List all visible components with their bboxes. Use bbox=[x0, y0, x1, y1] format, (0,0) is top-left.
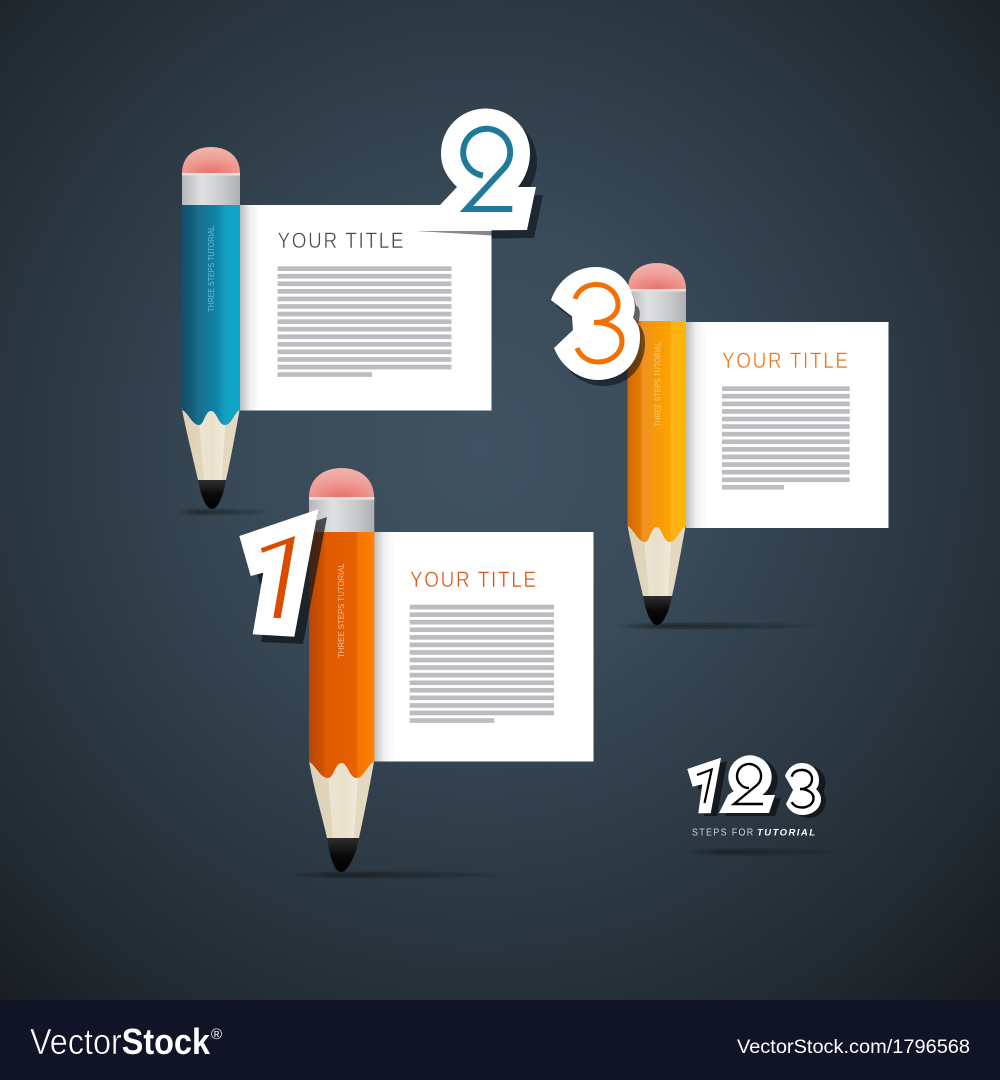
panel: step 2 bbox=[240, 205, 492, 410]
mini sticker 1 bbox=[687, 758, 721, 813]
digit 2 bbox=[463, 129, 512, 209]
panel: step 3 bbox=[686, 322, 888, 528]
ferrule top lip bbox=[309, 497, 374, 500]
eraser bbox=[182, 147, 240, 173]
panel sheet bbox=[686, 322, 888, 528]
wood centre facet bbox=[643, 524, 672, 596]
ferrule top lip bbox=[628, 289, 686, 292]
step 2 number sticker bbox=[417, 109, 536, 231]
mini tagline: STEPS FOR bbox=[692, 827, 753, 839]
pencil: yellow bbox=[627, 263, 686, 625]
title: YOUR TITLE bbox=[278, 229, 404, 253]
panel fold shading bbox=[374, 532, 394, 762]
step 1 number sticker bbox=[239, 509, 318, 637]
ferrule top lip bbox=[182, 173, 240, 176]
blue pencil ground shadow bbox=[177, 510, 273, 514]
panel: step 1 bbox=[374, 532, 594, 762]
panel fold shading bbox=[686, 322, 706, 528]
mini sticker 2 bbox=[719, 755, 775, 813]
mini 123 logo bbox=[685, 755, 845, 854]
step 1 number sticker shadow bbox=[248, 517, 327, 644]
eraser bbox=[628, 263, 686, 289]
footer background bbox=[0, 1000, 1000, 1080]
wood tip bbox=[182, 408, 240, 480]
orange pencil ground shadow bbox=[285, 873, 515, 877]
sticker shape bbox=[239, 509, 318, 637]
wood tip bbox=[627, 524, 686, 596]
lead bbox=[327, 838, 359, 872]
ferrule bbox=[182, 173, 240, 205]
lead bbox=[643, 596, 672, 625]
wood centre facet bbox=[327, 760, 359, 838]
panel sheet bbox=[374, 532, 594, 762]
panel fold shading bbox=[240, 205, 260, 410]
pencil label: THREE STEPS TUTORIAL bbox=[652, 342, 662, 427]
step 3 number sticker bbox=[551, 267, 640, 380]
ferrule bbox=[628, 289, 686, 321]
footer bar bbox=[0, 1000, 1000, 1080]
text lines bbox=[722, 386, 850, 490]
pencil label: THREE STEPS TUTORIAL bbox=[336, 563, 346, 658]
mini tagline emphasis: TUTORIAL bbox=[757, 828, 815, 838]
text lines bbox=[410, 605, 554, 723]
barrel bbox=[309, 532, 374, 778]
wood centre facet bbox=[198, 408, 226, 480]
mini sticker 3 bbox=[785, 763, 821, 815]
digit 1 bbox=[261, 536, 295, 618]
step 2 number sticker shadow bbox=[424, 117, 543, 239]
pencil: orange bbox=[309, 468, 374, 872]
text lines bbox=[278, 266, 452, 377]
mini logo shadow bbox=[693, 758, 826, 818]
digit 3 bbox=[575, 284, 622, 362]
step 2 sticker shadow wedge bbox=[416, 231, 492, 236]
footer logo: VectorStock bbox=[30, 1021, 211, 1062]
title: YOUR TITLE bbox=[722, 349, 848, 373]
yellow pencil ground shadow bbox=[615, 624, 825, 628]
panel sheet bbox=[240, 205, 492, 410]
wood tip bbox=[309, 760, 374, 838]
lead bbox=[198, 480, 226, 509]
ferrule bbox=[309, 497, 374, 532]
pencil label: THREE STEPS TUTORIAL bbox=[206, 226, 216, 312]
sticker shape bbox=[417, 109, 536, 231]
step 3 number sticker shadow bbox=[556, 273, 645, 386]
sticker shape bbox=[551, 267, 640, 380]
title: YOUR TITLE bbox=[410, 568, 536, 592]
pencil: blue bbox=[182, 147, 240, 509]
footer logo registered mark: ® bbox=[211, 1026, 222, 1043]
barrel bbox=[182, 205, 240, 425]
eraser bbox=[309, 468, 374, 497]
barrel bbox=[628, 321, 686, 542]
mini logo ground shadow bbox=[685, 850, 845, 854]
footer image id: VectorStock.com/1796568 bbox=[737, 1036, 970, 1058]
